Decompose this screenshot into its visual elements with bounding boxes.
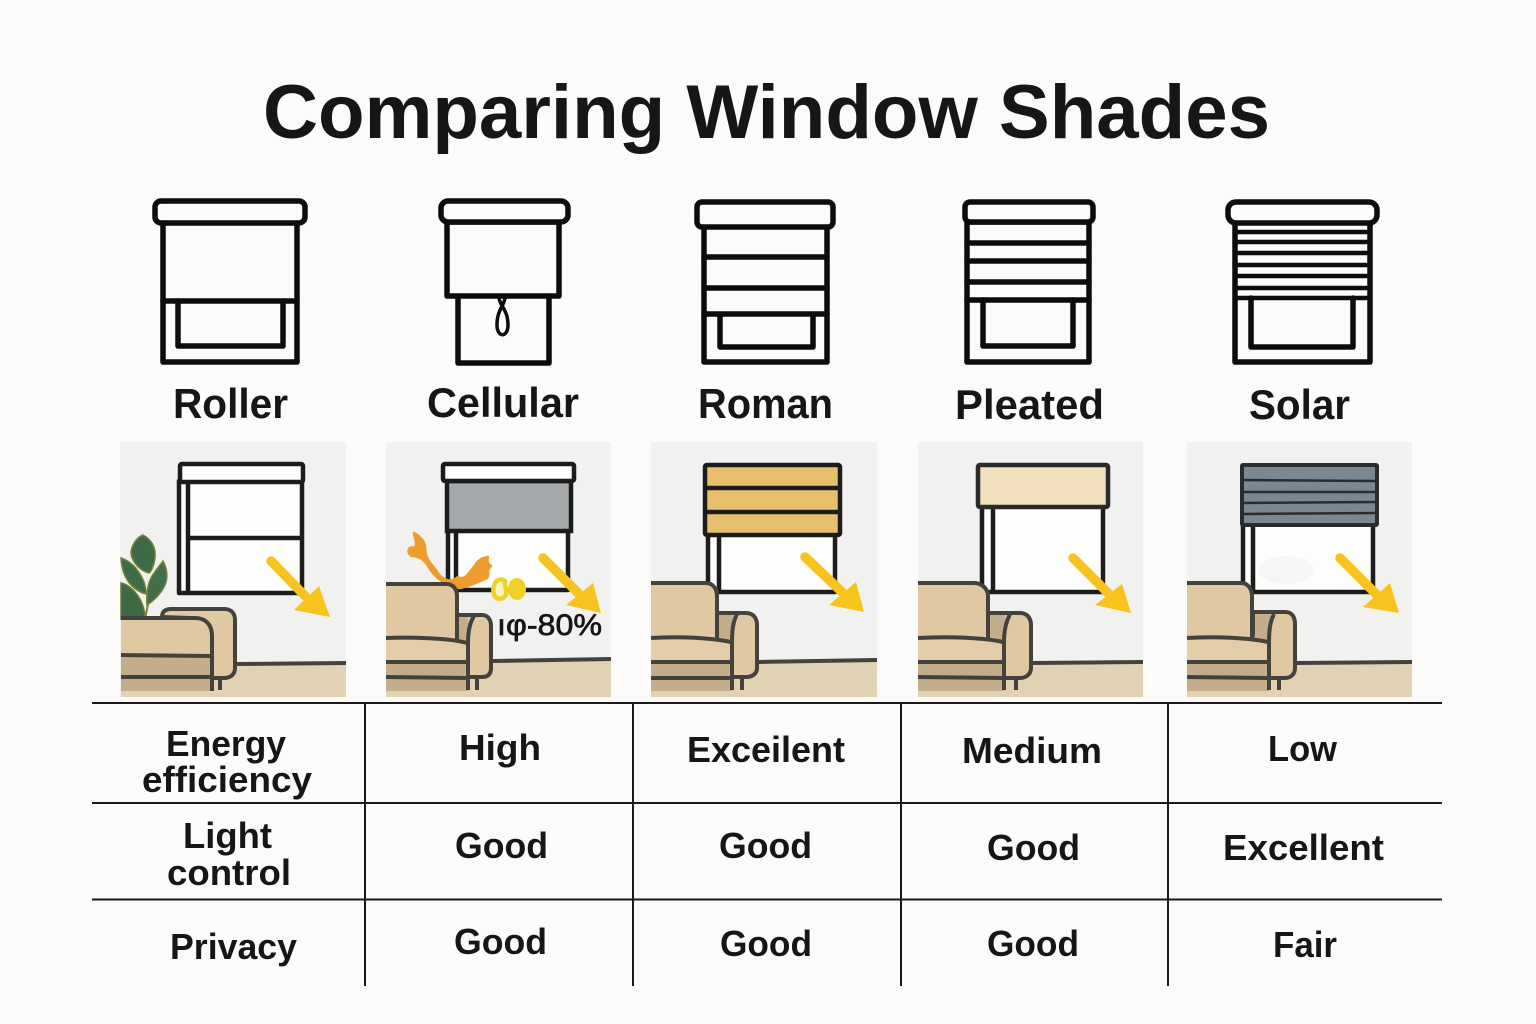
column: Roller icon — [155, 201, 305, 362]
panel: Cellular room scene — [386, 442, 611, 697]
row: Privacy: Good — [720, 923, 812, 964]
title: Comparing Window Shades — [263, 70, 1270, 155]
arrow: sunlight — [543, 558, 601, 613]
arrow: sunlight — [1073, 558, 1131, 613]
row: Privacy: Good — [454, 921, 547, 962]
label: Solar: Solar — [1249, 381, 1350, 428]
label: Pleated: Pleated — [955, 381, 1104, 428]
row: Privacy: Good — [987, 923, 1079, 964]
icon: orange flame squiggle — [408, 533, 491, 588]
row: Privacy: Fair — [1273, 924, 1337, 965]
row: Light control: control — [167, 852, 291, 893]
panel: Pleated room scene — [918, 442, 1143, 697]
arrow: sunlight — [271, 561, 330, 617]
row: Light control: Good — [719, 825, 812, 866]
row: Energy efficiency: Low — [1268, 728, 1338, 769]
row: Light control — [167, 815, 1384, 893]
row: Energy efficiency — [142, 723, 1338, 800]
text: garbled percentage: ıφ-80% — [497, 609, 602, 642]
panel: Roman room scene — [651, 442, 877, 697]
label: Roller: Roller — [173, 380, 288, 427]
icon: sofa — [121, 609, 235, 691]
icon: plant — [121, 535, 167, 619]
row: Energy efficiency: Medium — [962, 730, 1102, 771]
comparison table — [92, 703, 1442, 986]
column: Solar icon — [1228, 202, 1377, 362]
row: Energy efficiency: efficiency — [142, 759, 312, 800]
label: Cellular: Cellular — [427, 379, 579, 426]
row: Light control: Excellent — [1223, 827, 1384, 868]
row: Light control: Light — [183, 815, 272, 856]
icon: sofa — [918, 583, 1031, 691]
arrow: sunlight — [805, 557, 864, 612]
arrow: sunlight — [1340, 558, 1399, 613]
row: Privacy — [170, 921, 1337, 967]
row: Light control: Good — [455, 825, 548, 866]
panel: Solar room scene — [1187, 442, 1412, 697]
row: Light control: Good — [987, 827, 1080, 868]
icon: sofa — [651, 583, 757, 691]
row: Privacy: Privacy — [170, 926, 297, 967]
row: Energy efficiency: Energy — [166, 723, 286, 764]
panel: Roller room scene — [120, 442, 346, 697]
row: Energy efficiency: Exceilent — [687, 729, 845, 770]
icon: sofa — [1187, 583, 1295, 691]
column: Pleated icon — [965, 202, 1093, 362]
icon: yellow blobs — [493, 578, 526, 600]
icon: sofa — [386, 584, 491, 691]
column: Roman icon — [697, 202, 833, 362]
label: Roman: Roman — [698, 380, 833, 427]
row: Energy efficiency: High — [459, 727, 541, 768]
column: Cellular icon — [441, 201, 568, 363]
